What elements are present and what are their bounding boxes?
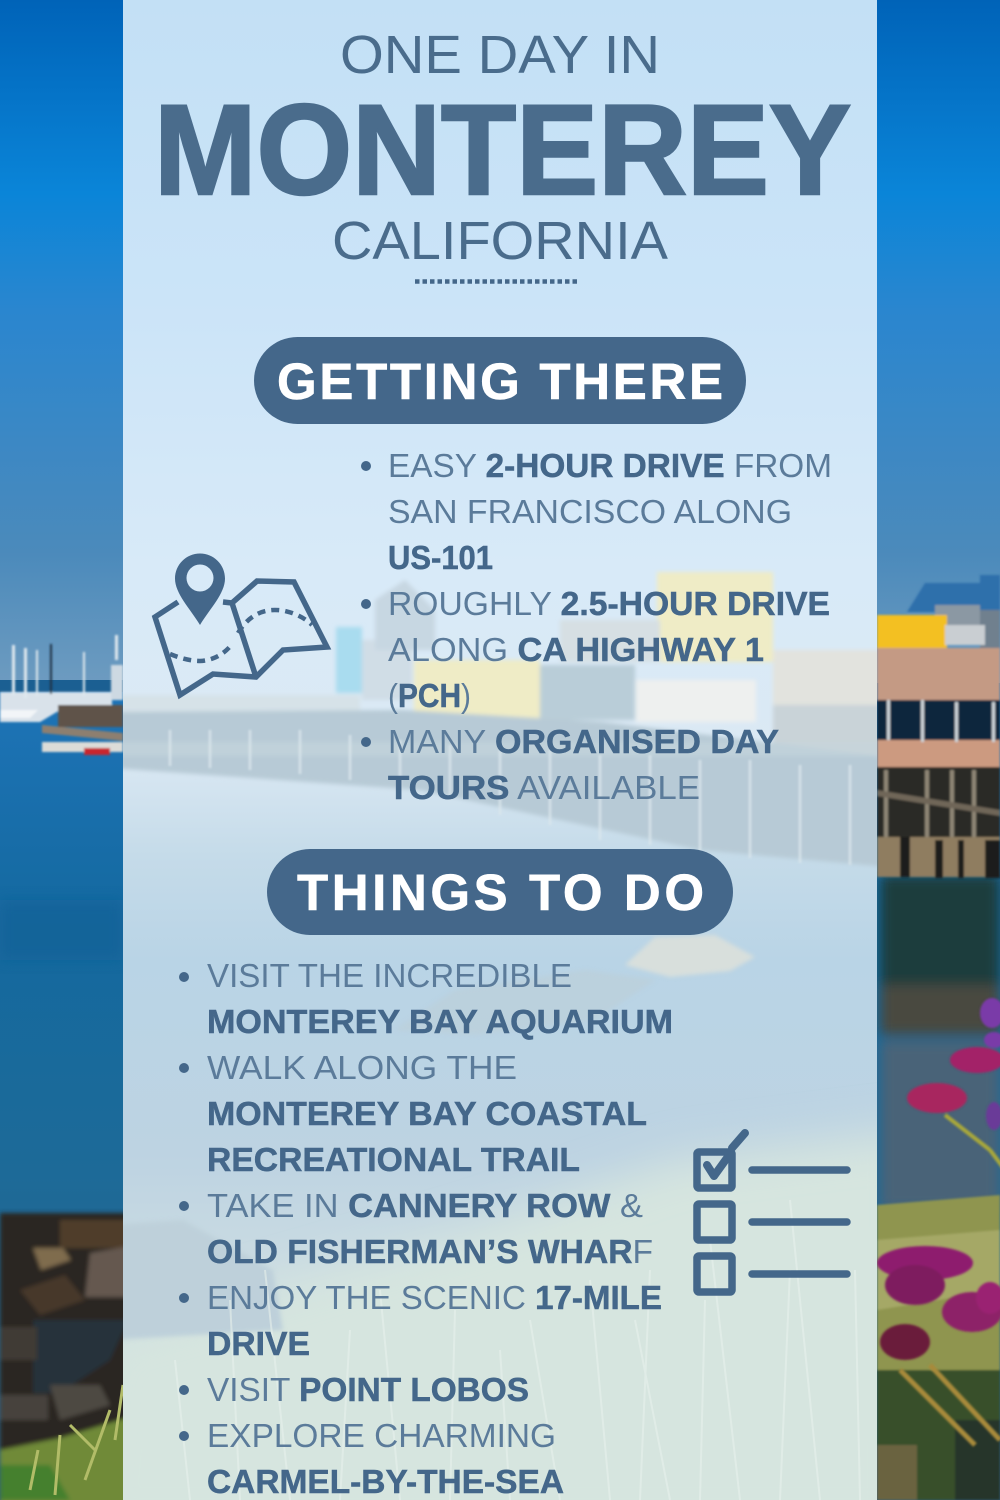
item: 17-mile drive: ENJOY THE SCENIC 17-MILE [207,1279,662,1316]
item: coastal trail: WALK ALONG THE [207,1049,517,1086]
wharf buildings [877,575,1000,878]
item: carmel: CARMEL-BY-THE-SEA [207,1463,564,1500]
faded piles [170,730,850,865]
heading pill: getting there [254,337,746,424]
translucent centre panel [123,0,877,1500]
heading pill: getting there: GETTING THERE [277,353,723,410]
faded rocks [110,935,755,1340]
item: aquarium [207,957,673,1040]
item: 17-mile drive [207,1279,662,1362]
bullet group [179,972,189,1441]
bullet group [361,461,371,747]
item: aquarium: MONTEREY BAY AQUARIUM [207,1003,673,1040]
heading pill: things to do: THINGS TO DO [297,864,704,921]
item: coastal trail: RECREATIONAL TRAIL [207,1141,580,1178]
item: day tours: TOURS AVAILABLE [388,769,700,806]
item: cannery row: TAKE IN CANNERY ROW & [207,1187,643,1224]
list: getting there [361,447,832,806]
item: carmel [207,1417,564,1500]
title: one day in: ONE DAY IN [340,25,660,85]
item: cannery row: OLD FISHERMAN’S WHARF [207,1233,653,1270]
item: 2-hour drive: EASY 2-HOUR DRIVE FROM [388,447,832,484]
icon: map with location pin [155,554,327,695]
item: coastal trail [207,1049,647,1178]
faded wharf seen through panel [110,572,890,867]
shoreline grass right [877,1195,1000,1500]
item: carmel: EXPLORE CHARMING [207,1417,556,1454]
icon: checklist [697,1133,847,1292]
item: coastal trail: MONTEREY BAY COASTAL [207,1095,647,1132]
flowers [877,998,1000,1445]
faded grass shoreline [285,1126,877,1322]
item: 17-mile drive: DRIVE [207,1325,310,1362]
title block [154,25,851,271]
dotted divider [415,279,580,284]
item: day tours: MANY ORGANISED DAY [388,723,779,760]
item: 2.5-hour drive: ROUGHLY 2.5-HOUR DRIVE [388,585,830,622]
item: day tours [388,723,779,806]
faded grass blades [175,1200,860,1500]
item: point lobos: VISIT POINT LOBOS [207,1371,529,1408]
left grass blades [30,1385,123,1495]
marina boats [0,635,123,755]
heading pill: things to do [267,849,733,935]
list: things to do [179,957,673,1500]
item: aquarium: VISIT THE INCREDIBLE [207,957,572,994]
item: 2-hour drive: US-101 [388,539,493,576]
title: Monterey: MONTEREY [154,79,851,222]
item: 2.5-hour drive: ALONG CA HIGHWAY 1 [388,631,764,668]
rocks and grass [0,1213,135,1500]
item: 2.5-hour drive: (PCH) [388,677,471,714]
item: 2.5-hour drive [388,585,830,714]
item: 2-hour drive [388,447,832,576]
title: California: CALIFORNIA [332,211,668,271]
item: cannery row [207,1187,653,1270]
item: 2-hour drive: SAN FRANCISCO ALONG [388,493,792,530]
